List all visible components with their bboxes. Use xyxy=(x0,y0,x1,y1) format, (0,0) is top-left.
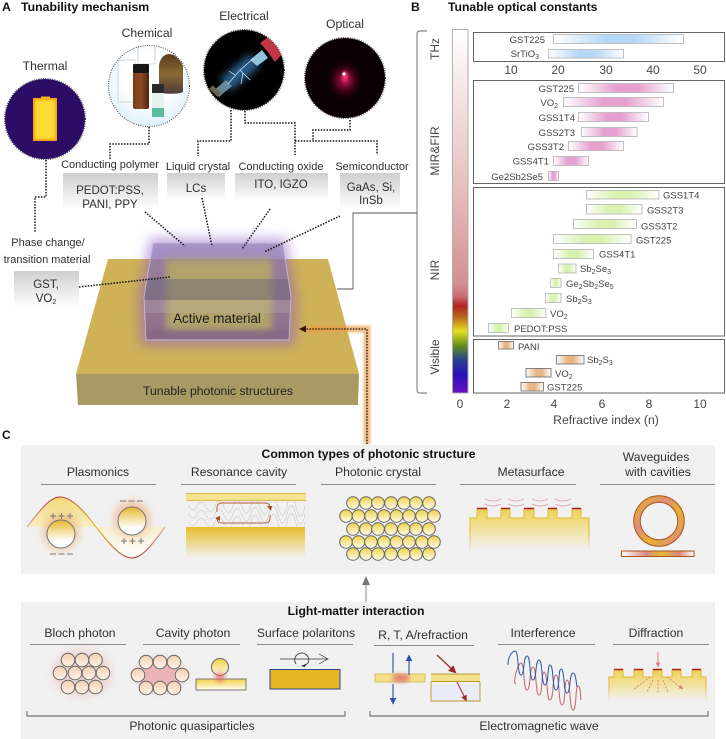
chart box: MIR and FIR: Ge2Sb2Se5 xyxy=(491,172,543,183)
column labels: Plasmonics xyxy=(67,465,129,479)
chart box: NIR: Sb xyxy=(566,294,578,305)
illustration: cavity photon particle on film xyxy=(196,658,246,690)
material box: PEDOT xyxy=(63,173,158,211)
bracket for spectrum bands xyxy=(417,31,427,393)
icon: thermal image xyxy=(4,78,86,160)
axis: THz tick labels: 10 xyxy=(504,63,518,77)
chart box: THz xyxy=(474,32,724,62)
material box: LCs: LCs xyxy=(186,183,206,195)
column labels: Waveguides xyxy=(623,450,689,464)
band label: Visible: Visible xyxy=(428,339,442,375)
illustration: plasmonics xyxy=(27,497,165,558)
axis: THz tick labels: 20 xyxy=(551,63,565,77)
column labels: Cavity photon xyxy=(156,626,230,640)
icon: chemical bottles xyxy=(108,44,190,126)
axis: refractive index tick labels: 10 xyxy=(693,397,707,411)
chart box: NIR: VO xyxy=(550,309,564,320)
column labels: R, T, A/refraction xyxy=(378,628,468,642)
panel B: tunable optical constants xyxy=(411,0,724,427)
heading A: A xyxy=(2,0,11,14)
material box: GST: GST, xyxy=(33,279,59,291)
column labels: Diffraction xyxy=(629,626,683,640)
panel C1: common types of photonic structure xyxy=(21,445,715,574)
chart box: Visible: 2 xyxy=(599,360,603,367)
heading A: Tunability mechanism xyxy=(21,0,149,14)
chart box: NIR: Sb xyxy=(583,279,594,290)
chart box: Visible: S xyxy=(603,355,609,366)
chart box: NIR: Se xyxy=(598,279,610,290)
dotted connectors from stimuli to materials xyxy=(35,110,377,233)
chart box: NIR: GSS3T2 xyxy=(641,222,677,232)
chart box: NIR: 3 xyxy=(607,269,611,276)
illustration: photonic crystal xyxy=(340,497,440,560)
column labels: Metasurface xyxy=(497,465,565,479)
chart box: NIR xyxy=(474,188,724,336)
icon: electrical discharge xyxy=(204,30,284,110)
band label: THz: THz xyxy=(428,38,442,60)
column labels: Interference xyxy=(510,626,576,640)
axis: refractive index tick labels: 2 xyxy=(504,397,511,411)
illustration: cavity photon crystal xyxy=(131,655,189,695)
axis title: Refractive index (n) xyxy=(553,413,659,427)
illustration: reflection, transmission, absorption xyxy=(375,653,425,703)
chart box: Visible: Sb xyxy=(587,355,599,366)
label: Liquid crystal: Liquid crystal xyxy=(166,161,230,173)
illustration: interference waves xyxy=(508,651,581,710)
panel C2: light-matter interaction xyxy=(21,602,715,739)
orange highlighted arrow to active material xyxy=(299,326,367,444)
chart box: NIR: Ge xyxy=(566,279,579,290)
chart box: NIR: 2 xyxy=(564,314,568,321)
illustration: refraction xyxy=(431,655,480,701)
illustration: surface polaritons xyxy=(270,653,340,689)
spectrum colour bar xyxy=(452,30,468,393)
chart box: Visible xyxy=(474,340,724,394)
material box: GST xyxy=(14,271,79,307)
bracket: photonic quasiparticles xyxy=(27,711,345,716)
axis: refractive index tick labels xyxy=(457,397,707,411)
illustration: resonance cavity xyxy=(186,493,306,558)
chart box: THz: SrTiO xyxy=(511,49,535,60)
column labels: Resonance cavity xyxy=(191,465,288,479)
axis: THz tick labels xyxy=(504,63,707,77)
heading: Common types of photonic structure xyxy=(262,447,476,461)
axis: THz tick labels: 50 xyxy=(693,63,707,77)
chart box: NIR: Sb xyxy=(580,264,592,275)
chart box: Visible: 2 xyxy=(569,374,573,381)
axis: refractive index tick labels: 6 xyxy=(599,397,606,411)
chart box: Visible: GST225 xyxy=(547,382,582,394)
illustration: metasurface xyxy=(470,499,589,552)
arrow between structure and interaction panels xyxy=(362,576,370,602)
active material layer xyxy=(138,238,297,346)
chart box: NIR: GSS2T3 xyxy=(647,206,683,216)
panel A: tunability mechanism xyxy=(2,0,417,444)
label: electromagnetic wave: Electromagnetic wave xyxy=(479,719,599,733)
column labels xyxy=(44,626,683,642)
label: Conducting polymer: Conducting polymer xyxy=(61,159,159,171)
chart box: NIR: 2 xyxy=(578,299,582,306)
bracket: electromagnetic wave xyxy=(370,711,708,716)
icon: optical laser spot xyxy=(304,38,386,118)
column labels: Photonic crystal xyxy=(335,465,421,479)
tunable photonic structure block xyxy=(76,259,359,405)
heading: Light-matter interaction xyxy=(288,604,424,618)
illustration: Bloch photon xyxy=(52,649,112,697)
column labels xyxy=(67,450,691,479)
material box: GST: VO xyxy=(36,293,52,305)
label: Optical: Optical xyxy=(326,17,364,31)
heading B: B xyxy=(411,0,420,14)
band label: MIR&FIR: MIR&FIR xyxy=(428,126,442,176)
axis: refractive index tick labels: 0 xyxy=(457,397,464,411)
label: photonic quasiparticles: Photonic quasiparticles xyxy=(129,719,255,733)
chart box: MIR and FIR: GSS3T2 xyxy=(528,142,564,153)
chart box: NIR: PEDOT:PSS xyxy=(514,324,567,335)
material box: semiconductors: GaAs, Si, xyxy=(347,182,395,194)
chart box: NIR: 5 xyxy=(610,284,614,291)
material box: PEDOT: PANI, PPY xyxy=(82,199,138,211)
chart box: MIR and FIR xyxy=(474,80,724,184)
chart box: NIR: Se xyxy=(596,264,607,275)
label: Electrical: Electrical xyxy=(219,9,269,23)
label: Thermal: Thermal xyxy=(23,59,67,73)
material box: semiconductors xyxy=(340,173,400,209)
chart box: MIR and FIR: GSS1T4 xyxy=(539,113,575,124)
panel C letter: C xyxy=(2,428,11,442)
label: Semiconductor: Semiconductor xyxy=(335,161,409,173)
label: Phase change xyxy=(4,237,90,266)
label: Phase change: Phase change/ xyxy=(11,237,86,249)
axis: THz tick labels: 40 xyxy=(646,63,660,77)
label: Chemical: Chemical xyxy=(122,26,172,40)
chart box: NIR: 3 xyxy=(588,299,592,306)
material box: PEDOT: PEDOT:PSS, xyxy=(76,185,144,197)
chart box: MIR and FIR: GSS2T3 xyxy=(539,128,575,139)
label: Phase change: transition material xyxy=(4,254,90,266)
chart box: Visible: VO xyxy=(555,369,569,380)
chart box: MIR and FIR: 2 xyxy=(554,103,558,110)
material box: ITO: ITO, IGZO xyxy=(254,179,308,191)
axis: THz tick labels: 30 xyxy=(599,63,613,77)
label: Active material: Active material xyxy=(173,311,261,326)
material box: LCs xyxy=(167,173,225,201)
column labels: with cavities xyxy=(624,465,691,479)
column labels: Bloch photon xyxy=(44,626,116,640)
column labels: Surface polaritons xyxy=(257,626,355,640)
label: Tunable photonic structures: Tunable photonic structures xyxy=(143,384,293,398)
chart box: Visible: 3 xyxy=(609,360,613,367)
label: Conducting oxide: Conducting oxide xyxy=(238,161,324,173)
chart box: NIR: GSS4T1 xyxy=(599,250,635,260)
chart box: MIR and FIR: GSS4T1 xyxy=(513,156,549,168)
chart box: THz: 3 xyxy=(535,54,539,61)
dotted connectors into active material xyxy=(79,198,340,287)
illustration: diffraction xyxy=(609,652,706,702)
chart box: NIR: 2 xyxy=(579,284,583,291)
heading B: Tunable optical constants xyxy=(448,0,598,14)
chart box: THz: GST225 xyxy=(510,35,545,46)
material box: semiconductors: InSb xyxy=(359,195,383,207)
chart box: NIR: GST225 xyxy=(636,236,671,246)
chart box: MIR and FIR: VO xyxy=(540,98,554,109)
material box: GST: 2 xyxy=(52,299,56,306)
band label: NIR: NIR xyxy=(428,259,442,280)
chart box: MIR and FIR: GST225 xyxy=(539,84,574,95)
axis: refractive index tick labels: 8 xyxy=(646,397,653,411)
chart box: NIR: S xyxy=(582,294,588,305)
connector to panel B xyxy=(337,213,417,289)
chart box: NIR: 2 xyxy=(592,269,596,276)
chart box: NIR: 2 xyxy=(594,284,598,291)
axis: refractive index tick labels: 4 xyxy=(551,397,558,411)
chart box: Visible: PANI xyxy=(518,342,539,353)
illustration: waveguide with ring cavity xyxy=(622,499,694,556)
chart box: NIR: GSS1T4 xyxy=(663,190,699,202)
material box: ITO xyxy=(235,173,328,201)
